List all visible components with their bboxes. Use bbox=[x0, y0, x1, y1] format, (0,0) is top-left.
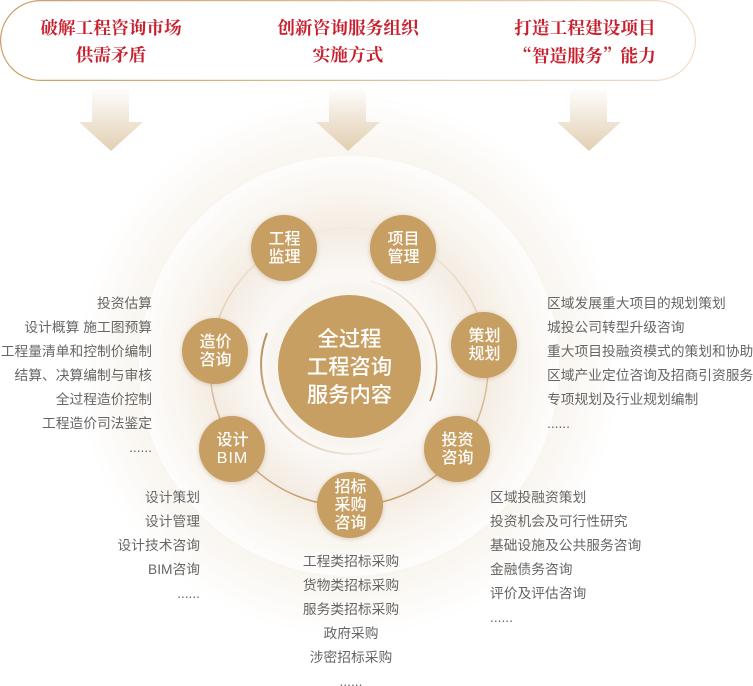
list: cost consulting: ...... bbox=[129, 440, 152, 455]
list: design: 设计策划 bbox=[145, 490, 200, 505]
list: design bbox=[117, 490, 200, 601]
node: design: BIM bbox=[217, 450, 248, 467]
node: procurement: 咨询 bbox=[334, 515, 366, 532]
list: planning: 专项规划及行业规划编制 bbox=[547, 392, 698, 407]
node: planning bbox=[451, 312, 517, 378]
list: planning: 区域发展重大项目的规划策划 bbox=[547, 296, 726, 311]
list: design: 设计技术咨询 bbox=[117, 538, 200, 553]
node: design: 设计 bbox=[216, 432, 248, 449]
heading: organisation: 创新咨询服务组织 bbox=[277, 18, 419, 38]
list: design: 设计管理 bbox=[145, 514, 200, 529]
node: project management: 管理 bbox=[387, 249, 420, 266]
list: procurement bbox=[303, 554, 399, 686]
node: planning: 规划 bbox=[468, 346, 500, 363]
list: procurement: 工程类招标采购 bbox=[303, 554, 399, 569]
node: investment bbox=[424, 416, 490, 482]
heading: market: 破解工程咨询市场 bbox=[40, 18, 182, 38]
list: cost consulting: 设计概算 施工图预算 bbox=[24, 320, 152, 335]
heading: capability: 打造工程建设项目 bbox=[514, 18, 656, 38]
list: design: BIM咨询 bbox=[148, 562, 200, 577]
heading: capability: “智造服务”能力 bbox=[514, 43, 656, 68]
heading: capability bbox=[514, 18, 656, 68]
list: cost consulting: 结算、决算编制与审核 bbox=[14, 368, 152, 383]
node: procurement: 招标 bbox=[334, 479, 366, 496]
node: project management bbox=[370, 215, 436, 281]
node: investment: 咨询 bbox=[441, 450, 474, 467]
list: cost consulting: 工程量清单和控制价编制 bbox=[1, 344, 152, 359]
heading: market bbox=[40, 18, 182, 65]
list: procurement: 服务类招标采购 bbox=[303, 602, 399, 617]
arrow: left bbox=[79, 94, 143, 151]
list: cost consulting: 工程造价司法鉴定 bbox=[42, 416, 152, 431]
node: procurement: 采购 bbox=[334, 497, 366, 514]
list: investment: 区域投融资策划 bbox=[490, 490, 586, 505]
node: planning: 策划 bbox=[468, 328, 500, 345]
arrow: centre bbox=[316, 94, 380, 151]
centre circle: 工程咨询 bbox=[307, 354, 392, 378]
list: planning: 城投公司转型升级咨询 bbox=[547, 320, 685, 335]
node: investment: 投资 bbox=[441, 432, 474, 449]
node: project management: 项目 bbox=[387, 231, 420, 248]
list: investment: 评价及评估咨询 bbox=[490, 586, 586, 601]
heading: organisation bbox=[277, 18, 419, 65]
heading: market: 供需矛盾 bbox=[76, 45, 146, 65]
centre circle bbox=[278, 295, 421, 438]
list: investment: 金融债务咨询 bbox=[490, 562, 573, 577]
node: supervision: 工程 bbox=[268, 231, 300, 248]
node: procurement bbox=[317, 472, 383, 538]
node: supervision bbox=[251, 215, 317, 281]
list: procurement: 货物类招标采购 bbox=[303, 578, 399, 593]
centre circle: 全过程 bbox=[318, 326, 381, 350]
list: planning: 重大项目投融资模式的策划和协助 bbox=[547, 344, 753, 359]
list: planning: 区域产业定位咨询及招商引资服务 bbox=[547, 368, 753, 383]
heading: organisation: 实施方式 bbox=[313, 45, 383, 65]
list: cost consulting: 全过程造价控制 bbox=[56, 392, 152, 407]
list: procurement: 政府采购 bbox=[323, 626, 378, 641]
list: planning bbox=[547, 296, 753, 431]
node: supervision: 监理 bbox=[268, 249, 300, 266]
centre circle: 服务内容 bbox=[307, 382, 392, 406]
top banner bbox=[0, 0, 696, 81]
list: procurement: 涉密招标采购 bbox=[310, 650, 392, 665]
list: investment: ...... bbox=[490, 610, 513, 625]
list: design: ...... bbox=[177, 586, 200, 601]
list: cost consulting bbox=[1, 296, 152, 455]
list: investment: 投资机会及可行性研究 bbox=[490, 514, 628, 529]
node: cost: 咨询 bbox=[199, 352, 232, 369]
arrow: right bbox=[557, 94, 621, 151]
list: investment bbox=[490, 490, 641, 625]
list: planning: ...... bbox=[547, 416, 570, 431]
node: cost bbox=[182, 318, 248, 384]
list: investment: 基础设施及公共服务咨询 bbox=[490, 538, 641, 553]
list: cost consulting: 投资估算 bbox=[97, 296, 152, 311]
node: cost: 造价 bbox=[199, 334, 232, 351]
node: design bbox=[199, 416, 265, 482]
